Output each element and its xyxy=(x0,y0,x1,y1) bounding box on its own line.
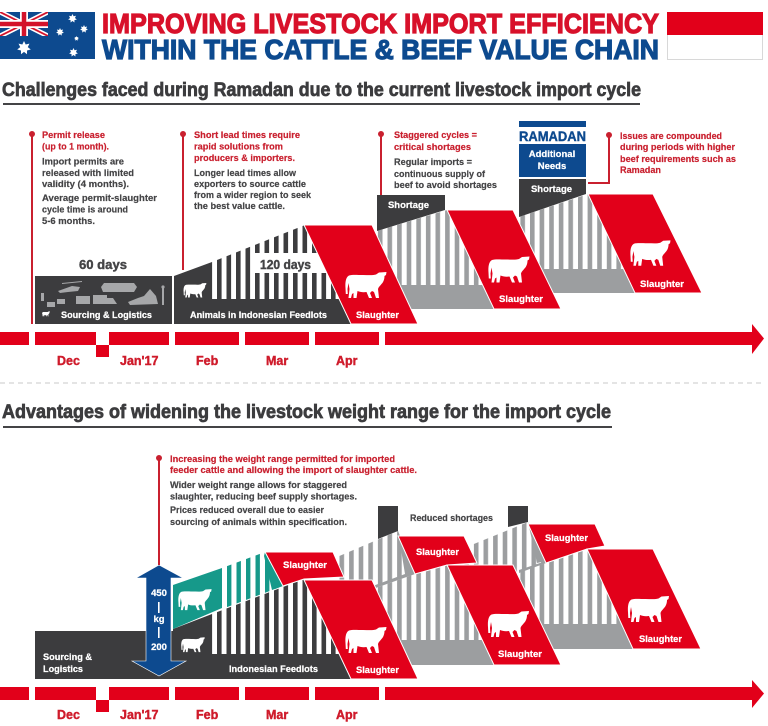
widened cycle 2: Slaughter xyxy=(498,649,542,660)
callout: short lead times xyxy=(180,130,312,270)
cycle 3 with Ramadan shortage: Shortage xyxy=(531,184,572,195)
callout: short lead times: exporters to source cattle xyxy=(194,179,306,190)
slaughter lower: Slaughter xyxy=(356,665,399,676)
callout: staggered cycles: continuous supply of xyxy=(394,169,486,180)
arrow: 200 to 450 kg weight range: kg xyxy=(153,614,165,625)
callout: permit release: Average permit-slaughter xyxy=(42,193,157,204)
callout: short lead times: Longer lead times allow xyxy=(194,168,297,179)
widened cycle 3: Slaughter xyxy=(545,533,588,544)
slaughter upper: Slaughter xyxy=(283,560,327,571)
chart: current import cycle xyxy=(35,121,702,324)
cycle 1: feedlots: Animals in Indonesian Feedlots xyxy=(190,310,327,321)
label: reduced shortages: Reduced shortages xyxy=(410,513,493,524)
callout: issues compounded: during periods with higher xyxy=(620,142,735,153)
cycle 1: feedlots: 120 days xyxy=(260,258,311,272)
flag: Australia xyxy=(0,12,95,59)
cycle 1: feedlots xyxy=(174,225,418,324)
callout: permit release: Import permits are xyxy=(42,156,124,168)
timeline arrow 1: Dec xyxy=(57,354,80,368)
arrow: 200 to 450 kg weight range xyxy=(132,565,186,676)
cycle 2: Slaughter xyxy=(499,294,543,305)
sourcing and logistics block: Sourcing & xyxy=(43,652,92,663)
callout: widening weight range: sourcing of animals within specification. xyxy=(170,517,347,528)
icon: logistics xyxy=(41,281,165,307)
flag: Indonesia xyxy=(667,12,763,60)
feedlots xyxy=(173,579,351,679)
timeline arrow 1 xyxy=(0,324,764,368)
timeline arrow 1: Apr xyxy=(336,354,358,368)
cycle 2 xyxy=(370,195,561,309)
callout: staggered cycles: Regular imports = xyxy=(394,157,472,168)
sourcing and logistics block xyxy=(35,631,173,679)
title: WITHIN THE CATTLE & BEEF VALUE CHAIN xyxy=(102,34,659,65)
chart: widened weight range cycle xyxy=(35,506,701,679)
callout: permit release xyxy=(29,130,157,324)
callout: widening weight range: Wider weight range allows for staggered xyxy=(170,480,347,491)
widened cycle 3: Slaughter xyxy=(639,634,682,645)
timeline arrow 2: Feb xyxy=(196,708,219,722)
callout: issues compounded: Issues are compounded xyxy=(620,131,722,142)
callout: permit release: cycle time is around xyxy=(42,204,128,216)
callout: widening weight range: slaughter, reducing beef supply shortages. xyxy=(170,492,357,502)
callout: permit release: released with limited xyxy=(42,168,134,179)
heading: advantages: Advantages of widening the livestock weight range for the import cycle xyxy=(2,402,611,423)
timeline arrow 2: Jan'17 xyxy=(120,708,158,722)
callout: widening weight range: feeder cattle and allowing the import of slaughter cattle. xyxy=(170,465,417,476)
cycle 3 with Ramadan shortage: RAMADAN xyxy=(519,128,586,144)
callout: staggered cycles: beef to avoid shortages xyxy=(394,180,497,191)
cycle 3 with Ramadan shortage: Needs xyxy=(538,161,566,172)
timeline arrow 1: Mar xyxy=(266,354,288,368)
teal heavier cattle band xyxy=(173,552,283,629)
callout: widening weight range: Increasing the weight range permitted for imported xyxy=(170,454,395,465)
timeline arrow 1: Feb xyxy=(196,354,219,368)
cycle 1: feedlots: Slaughter xyxy=(356,310,399,321)
callout: permit release: (up to 1 month). xyxy=(42,142,109,152)
slaughter upper xyxy=(265,552,344,586)
callout: widening weight range: Prices reduced overall due to easier xyxy=(170,505,324,516)
label: 60 days: 60 days xyxy=(79,258,127,272)
timeline arrow 2: Dec xyxy=(57,708,80,722)
callout: permit release: validity (4 months). xyxy=(42,179,129,190)
callout: widening weight range xyxy=(156,454,417,565)
cycle 3 with Ramadan shortage: Additional xyxy=(529,149,575,160)
widened cycle 3 xyxy=(464,506,701,649)
title: IMPROVING LIVESTOCK IMPORT EFFICIENCY xyxy=(102,8,659,39)
callout: short lead times: Short lead times require xyxy=(194,130,300,141)
callout: staggered cycles xyxy=(378,130,497,195)
callout: staggered cycles: critical shortages xyxy=(394,142,471,153)
sourcing and logistics block: Logistics xyxy=(43,664,83,675)
divider xyxy=(0,382,765,384)
cycle 3 with Ramadan shortage: Slaughter xyxy=(640,279,684,290)
callout: permit release: 5-6 months. xyxy=(42,216,95,227)
title xyxy=(102,8,659,65)
timeline arrow 2: Mar xyxy=(266,708,288,722)
timeline arrow 1: Jan'17 xyxy=(120,354,158,368)
callout: short lead times: from a wider region to seek xyxy=(194,190,312,201)
heading: challenges: Challenges faced during Ramadan due to the current livestock import cycle xyxy=(2,80,641,101)
callout: short lead times: the best value cattle. xyxy=(194,201,285,212)
callout: short lead times: producers & importers. xyxy=(194,153,295,164)
widened cycle 2: Slaughter xyxy=(416,547,459,558)
sourcing and logistics block xyxy=(35,276,172,324)
callout: issues compounded: Ramadan xyxy=(620,165,661,176)
callout: short lead times: rapid solutions from xyxy=(194,142,283,152)
cycle 3 with Ramadan shortage xyxy=(505,121,702,293)
timeline arrow 2: Apr xyxy=(336,708,358,722)
callout: issues compounded: beef requirements such as xyxy=(620,154,736,165)
timeline arrow 2 xyxy=(0,680,764,722)
callout: staggered cycles: Staggered cycles = xyxy=(394,130,477,141)
callout: issues compounded xyxy=(588,131,736,183)
arrow: 200 to 450 kg weight range: 450 xyxy=(151,588,167,599)
sourcing and logistics block: Sourcing & Logistics xyxy=(61,310,152,321)
slaughter lower xyxy=(304,580,418,679)
widened cycle 2 xyxy=(337,506,561,665)
arrow: 200 to 450 kg weight range: 200 xyxy=(151,642,167,653)
feedlots: Indonesian Feedlots xyxy=(229,664,318,675)
cycle 2: Shortage xyxy=(388,200,429,211)
callout: permit release: Permit release xyxy=(42,130,105,141)
